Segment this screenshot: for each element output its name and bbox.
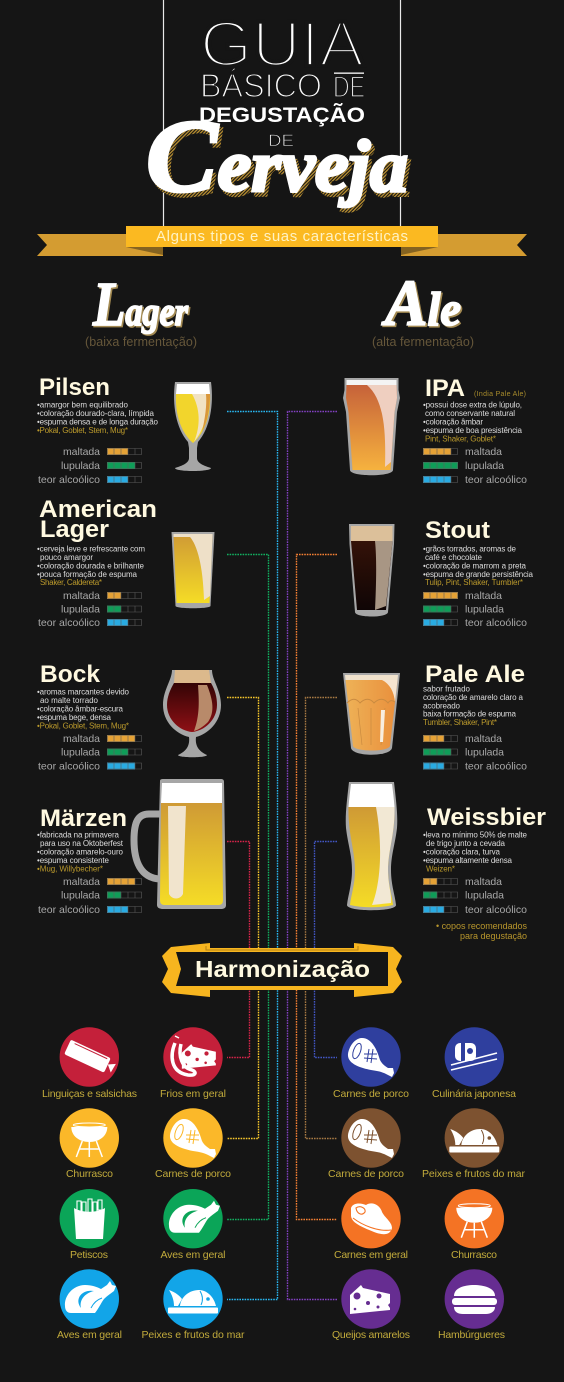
Pale Ale description: Tumbler, Shaker, Pint* <box>423 718 497 727</box>
icon: Weissbier glass <box>346 782 397 910</box>
icon: IPA glass <box>343 378 400 475</box>
heading: Ale: Ale <box>383 268 462 342</box>
label: Peixes e frutos do mar <box>142 1329 245 1341</box>
Pilsen ratings <box>38 446 142 486</box>
Pale Ale ratings: lupulada <box>465 746 504 758</box>
title: DE with overbar: DE <box>333 71 365 104</box>
Weissbier description: Weizen* <box>426 864 455 874</box>
panel: Petiscos <box>60 1189 119 1261</box>
IPA description: •coloração âmbar <box>423 418 483 426</box>
icon: sushi and chopsticks <box>451 1043 497 1070</box>
title: DEGUSTAÇÃO: DEGUSTAÇÃO <box>199 104 365 127</box>
panel: Carnes de porco brown <box>328 1108 404 1180</box>
panel: Churrasco yellow <box>60 1108 119 1180</box>
icon: Märzen mug <box>134 779 226 909</box>
Märzen name: Märzen <box>40 805 127 832</box>
footnote: recommended glasses <box>436 921 528 941</box>
Weissbier ratings: lupulada <box>465 890 504 902</box>
panel: Stout <box>349 517 534 629</box>
Bock description: •coloração âmbar-escura <box>37 704 124 714</box>
label: Queijos amarelos <box>332 1329 410 1341</box>
panel: Frios em geral <box>160 1027 226 1100</box>
icon: cold cuts <box>172 1036 216 1075</box>
IPA ratings: lupulada <box>465 460 504 472</box>
heading: Lager: Lager <box>94 272 190 340</box>
footnote: recommended glasses: • copos recomendados <box>436 921 528 931</box>
Märzen ratings: lupulada <box>61 890 100 902</box>
title block <box>146 0 411 226</box>
icon: chicken <box>169 1201 220 1233</box>
Pale Ale name: Pale Ale <box>425 661 525 688</box>
Bock ratings: maltada <box>63 733 100 745</box>
Märzen ratings <box>38 876 142 916</box>
icon: American Lager glass <box>172 532 214 608</box>
panel: Peixes e frutos do mar blue <box>142 1269 245 1341</box>
panel: Pilsen <box>37 374 212 486</box>
American Lager ratings: teor alcoólico <box>38 617 100 629</box>
Stout name: Stout <box>425 517 490 544</box>
panel: American Lager <box>37 496 214 629</box>
Märzen ratings: teor alcoólico <box>38 904 100 916</box>
subheading: alta fermentação: (alta fermentação) <box>372 335 474 349</box>
IPA ratings: teor alcoólico <box>465 474 527 486</box>
footnote: recommended glasses: para degustação <box>460 931 527 941</box>
Pilsen description: •amargor bem equilibrado <box>37 400 129 410</box>
label: Aves em geral <box>160 1249 226 1261</box>
label: Hambúrgueres <box>438 1329 505 1341</box>
Pilsen ratings: teor alcoólico <box>38 474 100 486</box>
American Lager description <box>37 544 145 587</box>
Bock description <box>37 688 130 730</box>
Stout ratings: teor alcoólico <box>465 617 527 629</box>
title: second DE: DE <box>268 131 294 150</box>
title: Cerveja script: Cerveja <box>149 103 411 218</box>
title: BÁSICO: BÁSICO <box>200 67 322 104</box>
icon: ham <box>348 1119 394 1158</box>
label: Culinária japonesa <box>432 1088 516 1100</box>
American Lager description: •coloração dourada e brilhante <box>37 562 145 570</box>
label: Aves em geral <box>57 1329 122 1341</box>
Weissbier ratings <box>423 876 527 916</box>
Pale Ale description: coloração de amarelo claro a <box>423 693 524 702</box>
panel: Carnes de porco yellow <box>155 1108 231 1180</box>
Pilsen ratings: maltada <box>63 446 100 458</box>
Bock ratings: lupulada <box>61 746 100 758</box>
icon: ham <box>170 1119 216 1158</box>
Stout ratings <box>423 590 527 629</box>
Pilsen ratings: lupulada <box>61 460 100 472</box>
panel: IPA <box>343 375 527 486</box>
American Lager description: Shaker, Caldereta* <box>40 578 102 587</box>
Stout description: Tulip, Pint, Shaker, Tumbler* <box>425 578 523 587</box>
banner text: Harmonização <box>195 956 370 982</box>
Weissbier description <box>423 830 528 874</box>
Bock ratings <box>38 733 142 772</box>
IPA description: como conservante natural <box>425 409 515 418</box>
label: Churrasco <box>66 1168 113 1180</box>
Bock description: ao malte torrado <box>40 696 99 705</box>
ribbon text: Alguns tipos e suas características <box>156 228 408 245</box>
Märzen description <box>37 830 124 874</box>
Pale Ale description <box>423 684 524 727</box>
panel: Peixes e frutos do mar brown <box>422 1108 526 1180</box>
American Lager description: •cerveja leve e refrescante com <box>37 544 145 554</box>
panel: Hambúrgueres <box>438 1269 505 1341</box>
label: Linguiças e salsichas <box>42 1088 137 1100</box>
icon: steak <box>351 1203 392 1234</box>
icon: hamburger <box>452 1285 497 1314</box>
American Lager name <box>39 496 157 543</box>
American Lager ratings: lupulada <box>61 604 100 616</box>
dotted connector lines <box>227 412 337 1300</box>
American Lager name: Lager <box>40 516 109 543</box>
Stout description: •grãos torrados, aromas de <box>423 544 517 554</box>
icon: fish <box>168 1290 218 1314</box>
icon: chicken <box>65 1281 116 1313</box>
Stout ratings: maltada <box>465 590 502 602</box>
Stout ratings: lupulada <box>465 604 504 616</box>
Weissbier description: •coloração clara, turva <box>423 848 501 856</box>
label: Petiscos <box>70 1249 108 1261</box>
IPA description: Pint, Shaker, Goblet* <box>425 434 496 444</box>
IPA ratings <box>423 446 527 486</box>
Märzen description: •coloração amarelo-ouro <box>37 848 124 856</box>
Stout description: café e chocolate <box>425 553 483 562</box>
icon: Pilsen glass <box>174 382 212 471</box>
Weissbier ratings: maltada <box>465 876 502 888</box>
Weissbier ratings: teor alcoólico <box>465 904 527 916</box>
title: Cerveja script: Cerveja <box>146 99 408 214</box>
panel: Linguiças e salsichas <box>42 1027 137 1100</box>
label: Churrasco <box>451 1249 497 1261</box>
Bock ratings: teor alcoólico <box>38 760 100 772</box>
IPA subtitle: (India Pale Ale) <box>474 391 526 398</box>
Pale Ale description: sabor frutado <box>423 684 471 694</box>
icon: fish <box>449 1129 499 1152</box>
icon: grill <box>456 1204 492 1238</box>
Bock name: Bock <box>40 661 101 688</box>
Märzen description: •fabricada na primavera <box>37 830 120 840</box>
Pale Ale ratings: maltada <box>465 733 502 745</box>
label: Carnes de porco <box>155 1168 231 1180</box>
Bock description: •espuma bege, densa <box>37 713 112 722</box>
IPA description: •possui dose extra de lúpulo, <box>423 400 522 410</box>
American Lager ratings <box>38 590 142 629</box>
Stout description <box>423 544 534 587</box>
Pilsen description <box>37 400 159 435</box>
Pilsen description: •coloração dourado-clara, límpida <box>37 409 155 418</box>
ribbon <box>37 226 527 256</box>
Weissbier description: •espuma altamente densa <box>423 856 513 865</box>
icon: grill <box>71 1123 107 1157</box>
icon: Pale Ale glass <box>343 673 400 755</box>
title: GUIA: GUIA <box>200 8 364 80</box>
Pale Ale description: acobreado <box>423 702 461 710</box>
IPA description <box>423 400 523 444</box>
icon: ham <box>348 1038 394 1077</box>
panel: Märzen <box>37 779 226 916</box>
heading: Lager: Lager <box>92 271 188 339</box>
Pale Ale ratings: teor alcoólico <box>465 760 527 772</box>
banner: Harmonização <box>162 943 402 997</box>
panel: Culinária japonesa <box>432 1027 516 1100</box>
American Lager name: American <box>39 496 157 523</box>
Märzen ratings: maltada <box>63 876 100 888</box>
panel: Carnes de porco navy <box>333 1027 409 1100</box>
Bock description: •Pokal, Goblet, Stem, Mug* <box>37 722 129 730</box>
label: Peixes e frutos do mar <box>422 1168 526 1180</box>
label: Carnes em geral <box>334 1249 408 1261</box>
Stout description: •espuma de grande persistência <box>423 570 534 579</box>
panel: Bock <box>37 661 221 772</box>
panel: Churrasco orange <box>445 1189 504 1261</box>
IPA description: •espuma de boa presistência <box>423 426 523 435</box>
panel: Queijos amarelos <box>332 1269 410 1341</box>
Pilsen description: •Pokal, Goblet, Stem, Mug* <box>37 426 128 435</box>
Weissbier name: Weissbier <box>427 804 546 831</box>
icon: Stout glass <box>349 524 394 616</box>
heading: Ale: Ale <box>381 267 461 340</box>
American Lager ratings: maltada <box>63 590 100 602</box>
panel: Pale Ale <box>343 661 527 772</box>
Weissbier description: •leva no mínimo 50% de malte <box>423 830 528 840</box>
icon: sausage <box>64 1040 117 1076</box>
Pilsen name: Pilsen <box>39 374 110 401</box>
Stout description: •coloração de marrom a preta <box>423 562 527 570</box>
Weissbier description: de trigo junto a cevada <box>426 839 506 848</box>
label: Carnes de porco <box>328 1168 404 1180</box>
IPA name: IPA <box>425 375 465 402</box>
icon: cheese <box>350 1285 390 1314</box>
American Lager description: •pouca formação de espuma <box>37 570 138 579</box>
panel: Carnes em geral <box>334 1189 408 1261</box>
icon: fries <box>74 1199 105 1239</box>
Pale Ale description: baixa formação de espuma <box>423 710 517 718</box>
Märzen description: para uso na Oktoberfest <box>40 839 124 848</box>
icon: Bock glass <box>163 670 221 757</box>
Märzen description: •espuma consistente <box>37 856 110 865</box>
panel: Weissbier <box>346 782 546 916</box>
panel: Aves em geral blue <box>57 1269 122 1341</box>
panel: Aves em geral green <box>160 1189 226 1261</box>
label: Carnes de porco <box>333 1088 409 1100</box>
IPA ratings: maltada <box>465 446 502 458</box>
American Lager description: pouco amargor <box>40 553 93 562</box>
Pilsen description: •espuma densa e de longa duração <box>37 418 159 426</box>
Märzen description: •Mug, Willybecher* <box>37 864 103 874</box>
subheading: baixa fermentação: (baixa fermentação) <box>85 335 197 349</box>
label: Frios em geral <box>160 1088 226 1100</box>
Bock description: •aromas marcantes devido <box>37 688 130 696</box>
Pale Ale ratings <box>423 733 527 772</box>
